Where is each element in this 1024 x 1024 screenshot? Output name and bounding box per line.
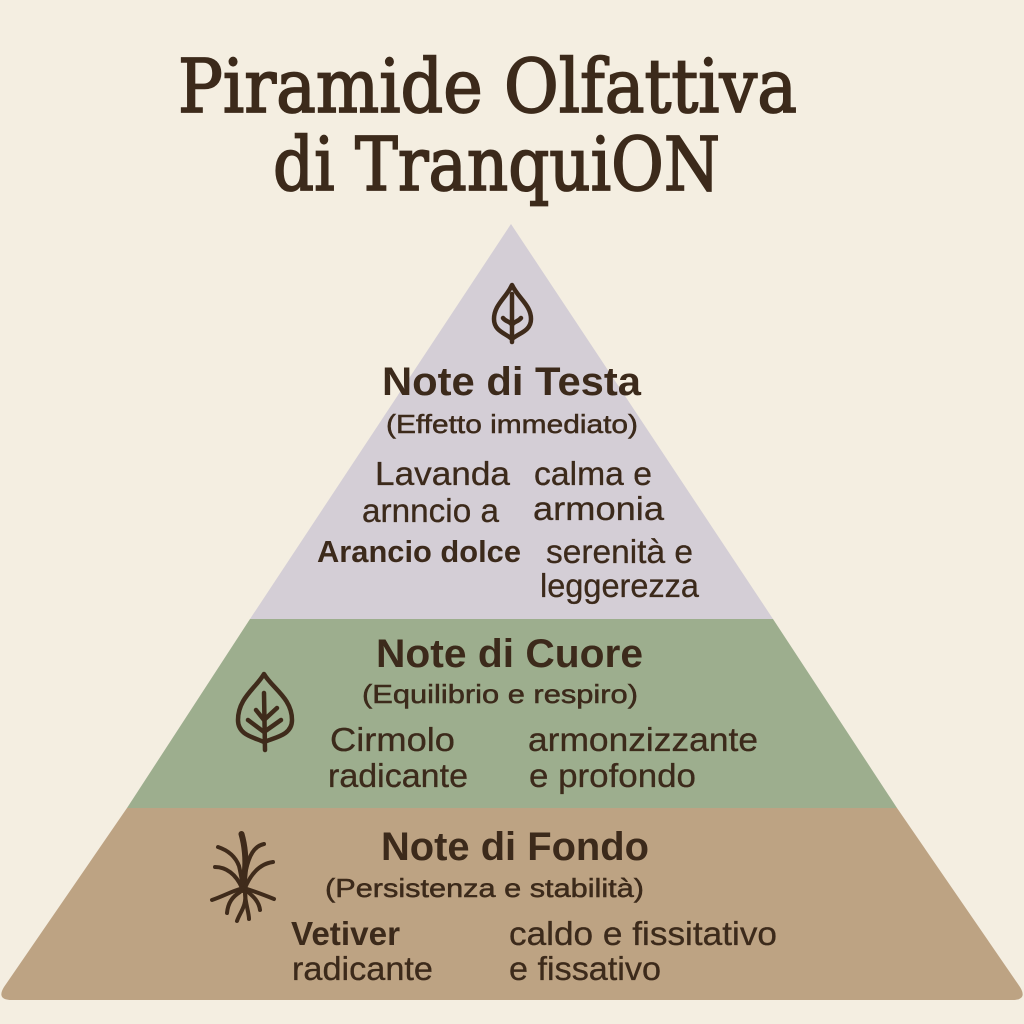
heading: note di testa: Note di Testa [382,360,642,404]
ingredients: testa: arnncio a [362,492,500,529]
ingredients: testa: Lavanda [375,455,511,492]
heading: note di fondo: Note di Fondo [381,825,649,869]
descriptions: fondo: e fissativo [509,950,661,987]
panel: note di cuore [127,619,897,808]
ingredients: testa [317,455,521,569]
descriptions: testa: serenità e [546,533,693,570]
descriptions: testa: leggerezza [540,567,700,604]
subheading: equilibrio e respiro: (Equilibrio e respiro) [362,679,638,709]
heading: note di cuore: Note di Cuore [376,632,643,676]
ingredients: fondo [291,915,433,987]
subheading: persistenza e stabilita: (Persistenza e stabilità) [325,873,644,903]
ingredients: cuore: radicante [328,757,468,794]
descriptions: fondo: caldo e fissitativo [509,915,777,952]
descriptions: testa [533,455,700,604]
panel: note di fondo [1,808,1023,1000]
green tier [127,619,897,808]
panel: note di testa [250,224,773,619]
title: Piramide Olfattiva [178,44,797,130]
descriptions: cuore: armonzizzante [528,721,758,758]
icon: leaf middle [238,674,292,750]
icon: leaf top [494,285,531,342]
title [178,44,797,208]
descriptions: cuore [528,721,758,794]
descriptions: cuore: e profondo [529,757,696,794]
descriptions: testa: calma e [534,455,652,492]
ingredients: fondo: radicante [292,950,433,987]
ingredients: testa: Arancio dolce [317,534,521,569]
subheading: effetto immediato: (Effetto immediato) [386,409,638,439]
ingredients: cuore: Cirmolo [330,721,455,758]
icon: roots [212,834,274,921]
title: di TranquiON [273,122,720,208]
lavender tier [250,224,773,619]
tan tier [1,808,1023,1000]
descriptions: fondo [509,915,777,987]
ingredients: cuore [328,721,468,794]
ingredients: fondo: Vetiver [291,915,400,952]
descriptions: testa: armonia [533,490,665,527]
